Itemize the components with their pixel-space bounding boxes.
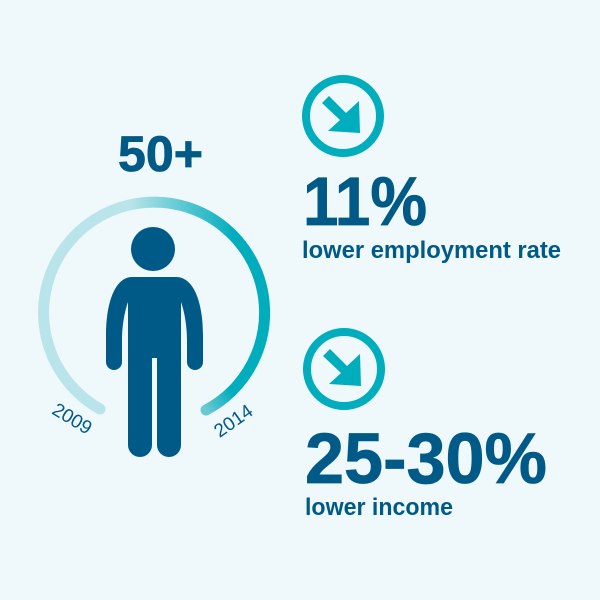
heading: 50+: 50+ (118, 126, 203, 182)
label: lower income: lower income (305, 494, 453, 521)
icon: person (106, 227, 203, 457)
label: lower employment rate: lower employment rate (302, 237, 561, 264)
stat: 25-30%: 25-30% (305, 420, 547, 499)
icon: down arrow 2 (307, 332, 381, 406)
label: 2014: 2014 (211, 401, 258, 442)
icon: down arrow 1 (306, 79, 380, 153)
label: 2009: 2009 (48, 399, 95, 439)
progress arc: 2009 to 2014 (44, 202, 265, 410)
stat: 11%: 11% (303, 163, 427, 240)
